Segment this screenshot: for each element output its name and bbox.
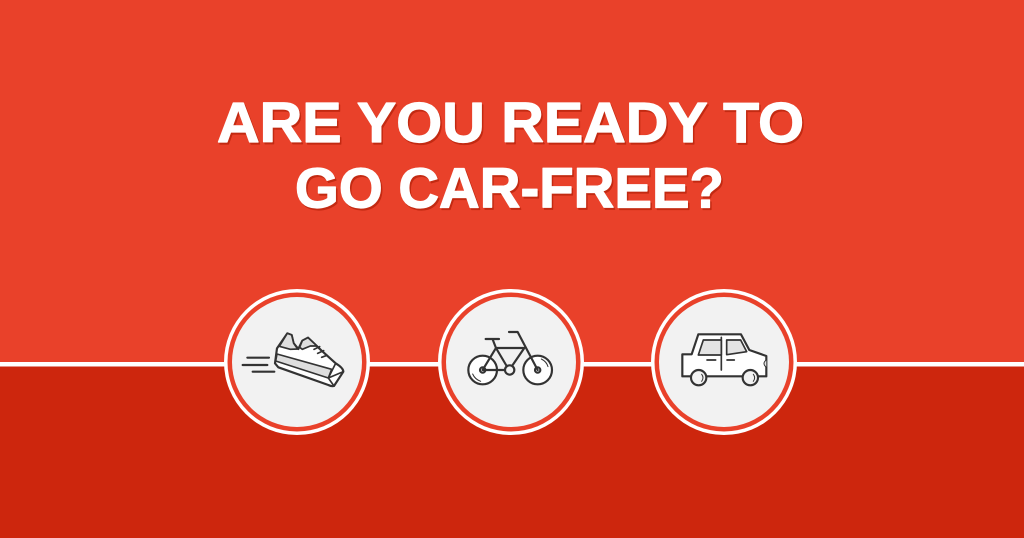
badge: walking shoe: [224, 289, 370, 435]
title: ARE YOU READY TO: [217, 91, 804, 155]
lower background panel: [0, 363, 1024, 538]
title: GO CAR-FREE?: [295, 156, 724, 220]
title: [217, 91, 806, 222]
badge: car: [651, 289, 797, 435]
title: GO CAR-FREE?: [296, 158, 726, 222]
icon: car: [682, 334, 766, 385]
icon: bicycle: [468, 332, 552, 384]
icon: running shoe with speed lines: [243, 333, 343, 386]
badge: bicycle: [438, 289, 584, 435]
horizontal white divider line: [0, 362, 1024, 366]
title: ARE YOU READY TO: [218, 93, 806, 157]
upper background panel: [0, 0, 1024, 363]
